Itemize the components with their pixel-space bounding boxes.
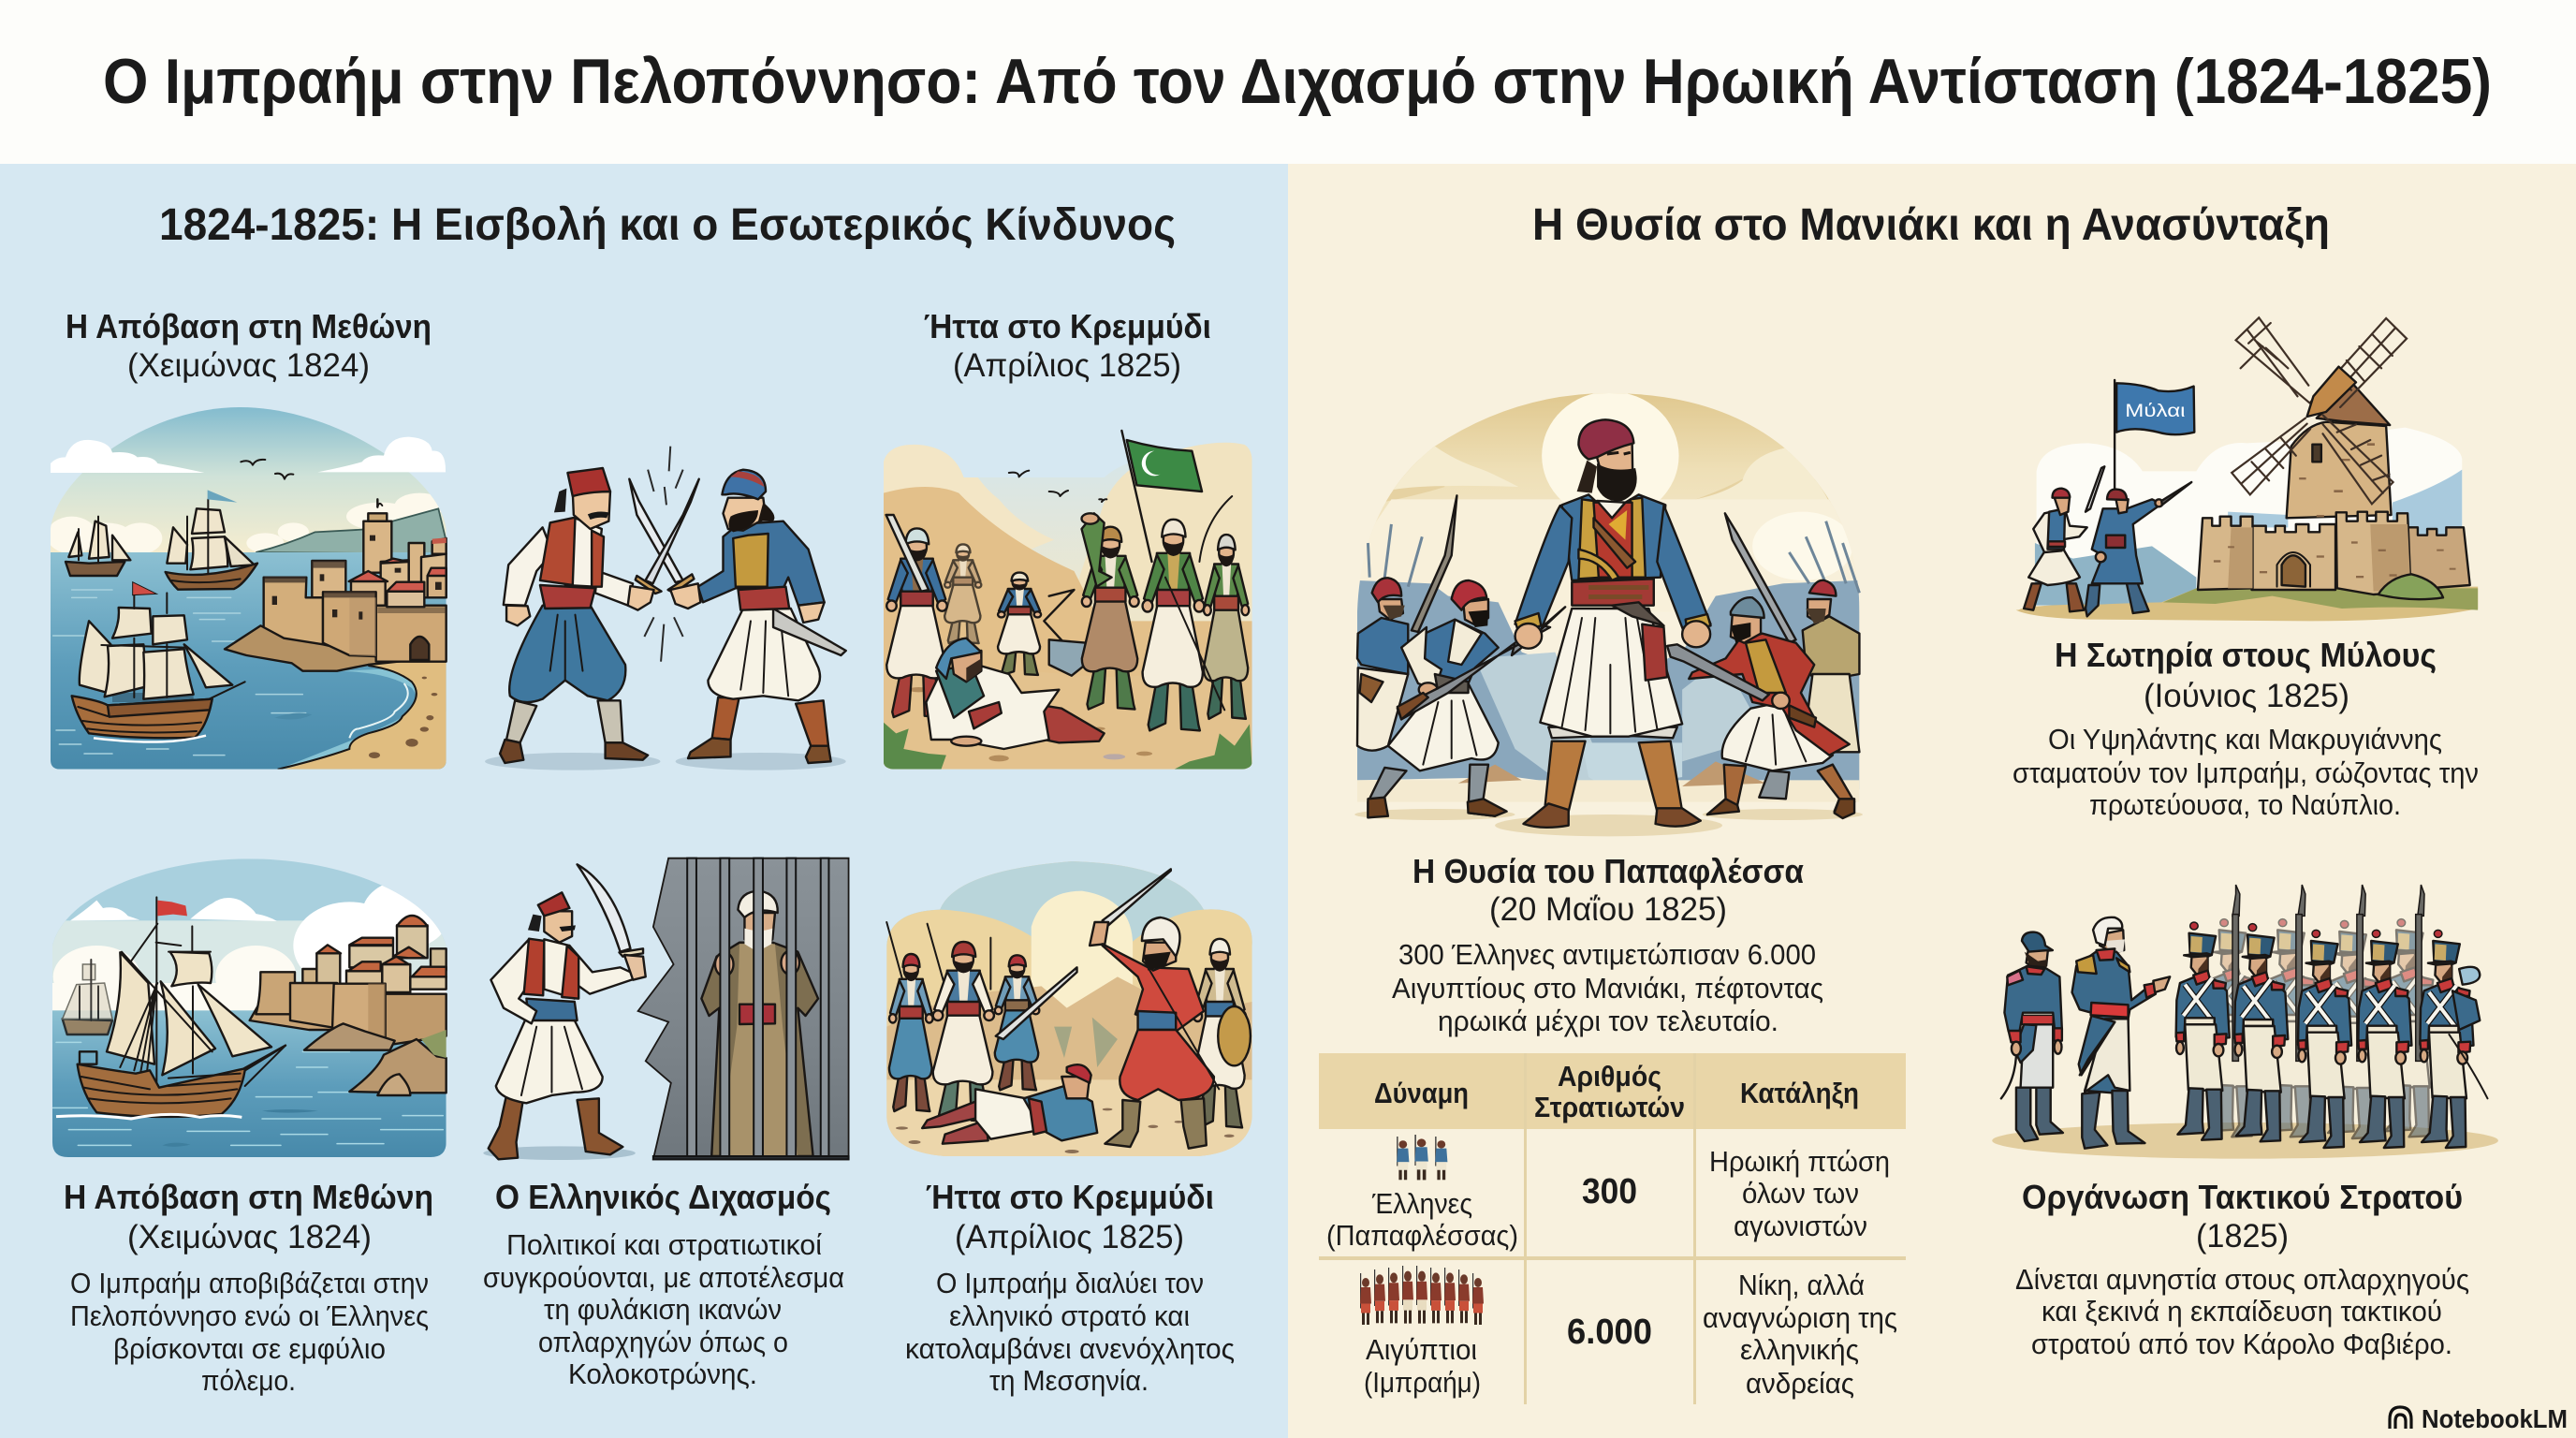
- table row: Egyptians: [1360, 1266, 1897, 1400]
- table row: Egyptians: αναγνώριση της: [1703, 1301, 1897, 1334]
- caption: defeat at Kremmydi bottom: (Απρίλιος 1825): [955, 1219, 1184, 1255]
- table row: Egyptians: ανδρείας: [1746, 1367, 1854, 1400]
- caption: salvation at the Mills: (Ιούνιος 1825): [2144, 678, 2349, 714]
- table header labels: [1374, 1060, 1859, 1123]
- green Egyptian troops: [1082, 496, 1249, 730]
- prison wall: [638, 858, 849, 1159]
- fallen warrior: [926, 638, 1105, 749]
- two Greek commanders: [2019, 466, 2191, 616]
- caption: landing at Methoni top: [66, 307, 432, 384]
- table header labels: Αριθμός: [1558, 1060, 1661, 1093]
- caption: organisation of regular army: Δίνεται αμνηστία στους οπλαρχηγούς: [2015, 1263, 2469, 1296]
- spear and blade debris: [1044, 590, 1074, 643]
- Greek swordsman left: [886, 515, 947, 717]
- upper sky clouds: [51, 440, 204, 473]
- general Fabvier: [2072, 917, 2170, 1149]
- panel: left background: [0, 164, 1288, 1438]
- table row: Egyptians: Νίκη, αλλά: [1738, 1269, 1865, 1301]
- caption: sacrifice of Papaflessas: ηρωικά μέχρι τον τελευταίο.: [1438, 1005, 1778, 1037]
- left section heading: 1824-1825: Η Εισβολή και ο Εσωτερικός Κίνδυνος: [159, 200, 1176, 250]
- prisoner: [701, 891, 818, 1156]
- caption: defeat at Kremmydi bottom: κατολαμβάνει ανενόχλητος: [905, 1332, 1235, 1365]
- caption: Greek civil strife: [483, 1178, 844, 1390]
- background spears: [1368, 521, 1859, 593]
- table row: Greeks: 300: [1582, 1172, 1637, 1211]
- middle ship: [166, 490, 257, 590]
- caption: landing at Methoni top: Η Απόβαση στη Μεθώνη: [66, 307, 432, 345]
- town walls: [250, 916, 446, 1095]
- table row: Egyptians: ελληνικής: [1740, 1333, 1859, 1366]
- cloud wisps: [70, 898, 277, 921]
- caption: Greek civil strife: συγκρούονται, με αποτέλεσμα: [483, 1261, 844, 1294]
- fortress of Methoni: [225, 499, 446, 671]
- NotebookLM watermark: NotebookLM: [2422, 1404, 2568, 1433]
- caption: Greek civil strife: Κολοκοτρώνης.: [568, 1357, 757, 1390]
- table row: Greeks: Έλληνες: [1371, 1187, 1472, 1220]
- icon: three Greek soldiers: [1397, 1135, 1447, 1180]
- table row: Egyptians: 6.000: [1567, 1313, 1652, 1352]
- caption: defeat at Kremmydi top: (Απρίλιος 1825): [953, 347, 1181, 384]
- fallen Greek: [922, 1064, 1097, 1144]
- sparks: [644, 447, 683, 662]
- caption: organisation of regular army: (1825): [2196, 1218, 2289, 1255]
- right clouds: [317, 437, 446, 472]
- caption: salvation at the Mills: Οι Υψηλάντης και Μακρυγιάννης: [2048, 723, 2442, 756]
- caption: organisation of regular army: στρατού από τον Κάρολο Φαβιέρο.: [2031, 1328, 2452, 1360]
- caption: salvation at the Mills: σταματούν τον Ιμπραήμ, σώζοντας την: [2012, 756, 2479, 789]
- flag Mylai: Μύλαι: [2125, 401, 2185, 421]
- panel: right background: [1288, 164, 2576, 1438]
- Greek chieftain with sword: [489, 864, 646, 1159]
- caption: Greek civil strife: Ο Ελληνικός Διχασμός: [495, 1178, 831, 1216]
- caption: defeat at Kremmydi top: [924, 307, 1211, 384]
- central hero Papaflessas: [1515, 419, 1710, 828]
- caption: Greek civil strife: οπλαρχηγών όπως ο: [538, 1326, 788, 1358]
- blue allies: [886, 922, 1077, 1122]
- illustration: Ibrahim's troops in battle: [886, 861, 1252, 1156]
- right front soldier in red: [1667, 597, 1854, 818]
- sails: [2232, 317, 2407, 504]
- table row: Greeks: όλων των: [1742, 1177, 1859, 1210]
- right rear soldier: [1759, 580, 1859, 799]
- table header labels: Δύναμη: [1374, 1077, 1469, 1109]
- caption: sacrifice of Papaflessas: 300 Έλληνες αντιμετώπισαν 6.000: [1398, 938, 1816, 971]
- illustration: harbour with merchant ship: [37, 852, 459, 1160]
- caption: landing at Methoni bottom: Ο Ιμπραήμ αποβιβάζεται στην: [70, 1267, 429, 1299]
- red commander: [1090, 869, 1219, 1149]
- caption: sacrifice of Papaflessas: Η Θυσία του Παπαφλέσσα: [1412, 852, 1804, 890]
- table header labels: Στρατιωτών: [1534, 1091, 1685, 1123]
- table row: Greeks: Ηρωική πτώση: [1709, 1145, 1890, 1178]
- table row: Egyptians: Αιγύπτιοι: [1366, 1333, 1477, 1366]
- table row: Greeks: [1326, 1135, 1890, 1252]
- illustration: Papaflessas at Maniaki: [1348, 391, 1872, 836]
- left rear soldier: [1357, 578, 1408, 751]
- front rank soldiers: [2176, 922, 2487, 1148]
- cell bars: [653, 858, 849, 1159]
- right fighter: [670, 470, 846, 763]
- castle: [2198, 512, 2470, 594]
- caption: organisation of regular army: [2015, 1178, 2469, 1360]
- caption: sacrifice of Papaflessas: Αιγυπτίους στο Μανιάκι, πέφτοντας: [1392, 972, 1823, 1005]
- rear rank and rifles: [2206, 885, 2437, 1138]
- table row: Egyptians: (Ιμπραήμ): [1364, 1366, 1481, 1399]
- ground: [2016, 587, 2478, 621]
- table header band: [1319, 1053, 1906, 1129]
- caption: Greek civil strife: τη φυλάκιση ικανών: [544, 1293, 782, 1326]
- left front soldier: [1368, 580, 1565, 817]
- caption: defeat at Kremmydi bottom: Ήττα στο Κρεμμύδι: [926, 1178, 1214, 1216]
- caption: salvation at the Mills: Η Σωτηρία στους Μύλους: [2055, 636, 2437, 674]
- header band: [0, 0, 2576, 164]
- caption: defeat at Kremmydi bottom: [905, 1178, 1235, 1397]
- bush: [2378, 574, 2443, 599]
- icon: NotebookLM logo: [2390, 1407, 2411, 1429]
- illustration: two Greek fighters crossing swords: [485, 447, 846, 770]
- caption: sacrifice of Papaflessas: [1392, 852, 1823, 1037]
- caption: defeat at Kremmydi bottom: ελληνικό στρατό και: [949, 1299, 1190, 1332]
- flag Mylai: [2115, 380, 2194, 489]
- table row: Greeks: (Παπαφλέσσας): [1326, 1219, 1518, 1252]
- aide officer: [2001, 932, 2063, 1141]
- caption: landing at Methoni bottom: πόλεμο.: [201, 1364, 296, 1397]
- caption: landing at Methoni bottom: [64, 1178, 433, 1397]
- caption: landing at Methoni bottom: (Χειμώνας 1824): [127, 1219, 372, 1255]
- caption: landing at Methoni bottom: Η Απόβαση στη Μεθώνη: [64, 1178, 433, 1216]
- caption: defeat at Kremmydi bottom: τη Μεσσηνία.: [989, 1364, 1149, 1397]
- right spear: [1725, 513, 1796, 643]
- caption: landing at Methoni bottom: βρίσκονται σε εμφύλιο: [113, 1332, 386, 1365]
- caption: organisation of regular army: Οργάνωση Τακτικού Στρατού: [2022, 1178, 2463, 1216]
- caption: sacrifice of Papaflessas: (20 Μαΐου 1825): [1489, 891, 1727, 928]
- caption: landing at Methoni bottom: Πελοπόννησο ενώ οι Έλληνες: [70, 1299, 429, 1332]
- comparison table: [1319, 1053, 1906, 1404]
- caption: salvation at the Mills: [2012, 636, 2479, 821]
- caption: salvation at the Mills: πρωτεύουσα, το Ναύπλιο.: [2089, 788, 2401, 821]
- caption: organisation of regular army: και ξεκινά η εκπαίδευση τακτικού: [2042, 1295, 2442, 1328]
- caption: defeat at Kremmydi bottom: Ο Ιμπραήμ διαλύει τον: [936, 1267, 1204, 1299]
- icon: massed Egyptian soldiers: [1360, 1266, 1484, 1325]
- windmill: [2232, 317, 2407, 518]
- illustration: regular army with Fabvier: [1992, 885, 2498, 1159]
- illustration: harbour of Methoni with ships: [37, 398, 459, 777]
- illustration: windmill at Myloi: [2016, 317, 2478, 621]
- background warriors: [944, 544, 1041, 675]
- illustration: defeat at Kremmydi: [879, 431, 1260, 774]
- main caravel: [56, 897, 285, 1119]
- rifle left: [1412, 495, 1456, 632]
- gulls: [241, 460, 293, 479]
- left fighter: [500, 468, 654, 763]
- white-turbaned soldier with shield: [1193, 939, 1251, 1127]
- table header labels: Κατάληξη: [1740, 1077, 1859, 1109]
- right section heading: Η Θυσία στο Μανιάκι και η Ανασύνταξη: [1532, 200, 2330, 250]
- caption: landing at Methoni top: (Χειμώνας 1824): [127, 347, 370, 384]
- caption: defeat at Kremmydi top: Ήττα στο Κρεμμύδι: [924, 307, 1211, 345]
- crossing swords: [629, 479, 699, 594]
- caption: Greek civil strife: Πολιτικοί και στρατιωτικοί: [506, 1228, 822, 1261]
- foreground ship: [72, 582, 245, 741]
- table row: Greeks: αγωνιστών: [1734, 1210, 1867, 1242]
- far ship: [63, 960, 112, 1034]
- illustration: Greek fighter and jailed chieftain: [483, 858, 849, 1160]
- distant ship: [66, 517, 130, 576]
